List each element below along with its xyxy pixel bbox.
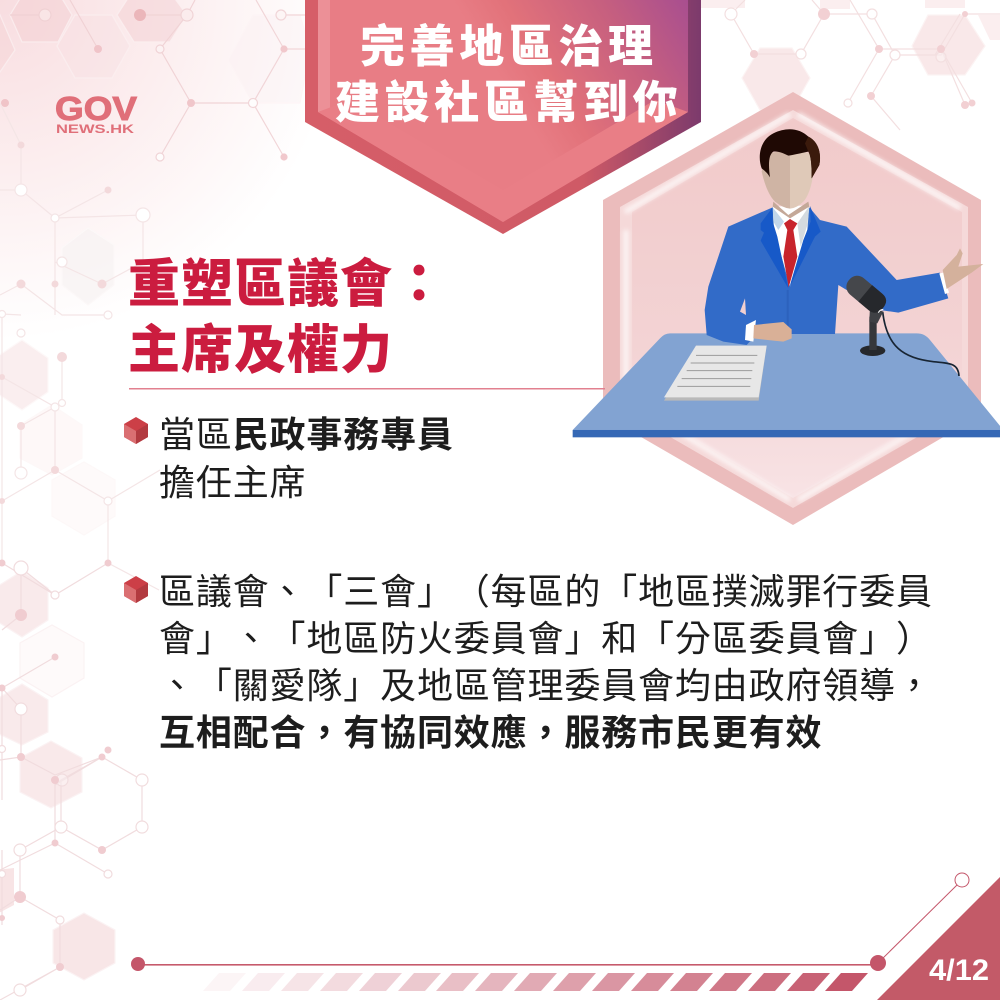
logo: GOV news.hk: GOV (55, 90, 137, 127)
bullet two (124, 571, 933, 753)
logo: GOV news.hk: NEWS.HK (56, 124, 135, 136)
paper (664, 346, 767, 401)
footer stripes (203, 973, 868, 991)
title text: 建設社區幫到你 (335, 77, 682, 128)
background: hexagon network left (0, 560, 148, 1000)
title text (335, 21, 682, 128)
microphone (842, 272, 959, 376)
page number: 4/12 (929, 954, 989, 987)
text: 民政事務專員 (233, 414, 454, 455)
illustration: presenter at desk (573, 129, 1000, 437)
section heading: 主席及權力 (128, 322, 393, 380)
text: 當區 (159, 414, 233, 455)
section heading (128, 256, 446, 380)
background: hexagon network top left (0, 0, 310, 161)
text: 擔任主席 (159, 462, 306, 503)
icon: cube bullet (124, 417, 148, 444)
title text: 完善地區治理 (360, 21, 658, 72)
text: 、「關愛隊」及地區管理委員會均由政府領導， (159, 665, 933, 706)
text: 會」、「地區防火委員會」和「分區委員會」） (159, 618, 933, 659)
text: 區議會、「三會」（每區的「地區撲滅罪行委員 (159, 571, 933, 612)
background: hexagon network upper left (0, 103, 160, 590)
text: 互相配合，有協同效應，服務市民更有效 (159, 712, 822, 753)
icon: cube bullet (124, 576, 148, 603)
footer line (131, 873, 969, 971)
divider (129, 388, 605, 390)
desk (573, 333, 1000, 437)
presenter (705, 129, 983, 345)
banner: title (305, 0, 701, 234)
illustration hexagon (603, 92, 981, 525)
section heading: 重塑區議會： (128, 256, 446, 314)
background: hexagon network top right (700, 0, 1000, 130)
bullet one (124, 414, 454, 503)
page number corner (877, 877, 1000, 1000)
